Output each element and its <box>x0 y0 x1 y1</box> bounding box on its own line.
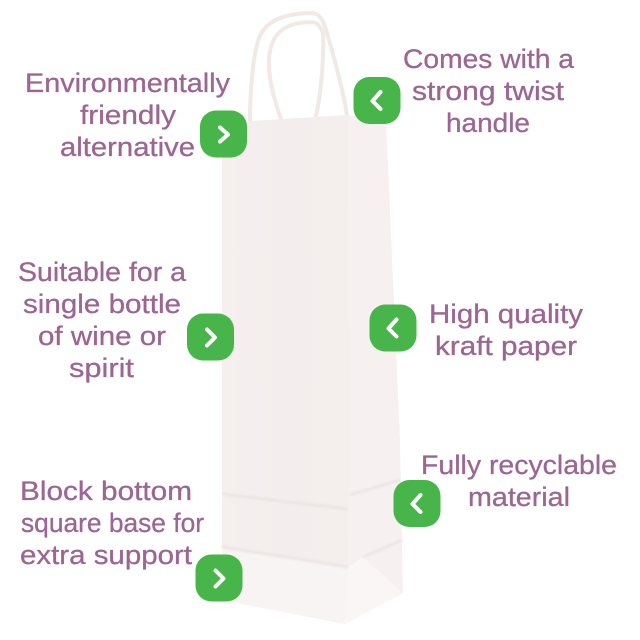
icon: right chevron button, environmentally friendly <box>200 110 247 158</box>
label: suitable for a single bottle: of wine or <box>38 321 166 351</box>
label: fully recyclable material: material <box>468 482 570 512</box>
icon: left chevron button, kraft paper <box>370 304 416 352</box>
product: white paper bag <box>222 13 403 624</box>
label: environmentally friendly alternative <box>25 68 231 162</box>
label: block bottom square base: Block bottom <box>20 476 192 506</box>
icon: left chevron button, recyclable <box>394 480 440 527</box>
icon: right chevron button, block bottom <box>196 554 242 602</box>
label: strong twist handle: Comes with a <box>403 44 575 74</box>
label: block bottom square base: extra support <box>20 540 193 570</box>
label: block bottom square base <box>20 476 204 570</box>
label: environmentally friendly alternative: Environmentally <box>25 68 231 98</box>
icon: left chevron button, twist handle <box>354 77 400 124</box>
bag front panel <box>222 115 349 567</box>
bag base <box>222 547 348 624</box>
label: suitable for a single bottle: spirit <box>69 353 135 383</box>
bag handles <box>250 13 347 122</box>
bag crease <box>222 480 402 567</box>
bag body <box>222 115 403 624</box>
label: strong twist handle <box>403 44 575 138</box>
label: suitable for a single bottle <box>18 257 187 383</box>
label: fully recyclable material <box>421 450 617 512</box>
label: environmentally friendly alternative: friendly <box>80 100 177 130</box>
label: high quality kraft paper: High quality <box>429 299 584 329</box>
label: environmentally friendly alternative: alternative <box>60 132 195 162</box>
label: fully recyclable material: Fully recyclable <box>421 450 617 480</box>
label: block bottom square base: square base for <box>21 508 204 538</box>
label: suitable for a single bottle: Suitable for a <box>18 257 187 287</box>
label: high quality kraft paper: kraft paper <box>435 331 577 361</box>
icon: right chevron button, single bottle <box>187 314 234 360</box>
bag base gusset <box>345 557 403 624</box>
label: high quality kraft paper <box>429 299 584 361</box>
label: strong twist handle: strong twist <box>412 76 565 106</box>
label: strong twist handle: handle <box>446 108 530 138</box>
label: suitable for a single bottle: single bottle <box>23 289 181 319</box>
